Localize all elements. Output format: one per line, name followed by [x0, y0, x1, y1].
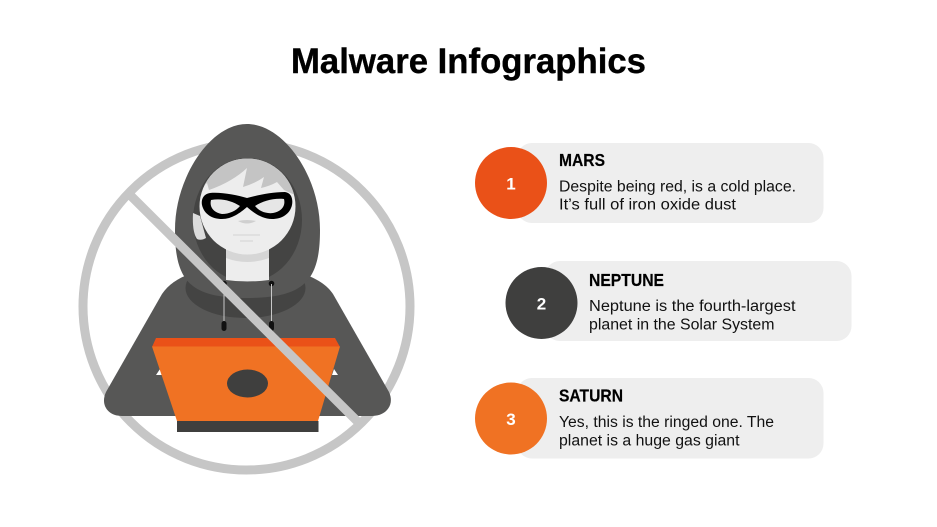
hair: [204, 158, 294, 194]
laptop base: [177, 421, 318, 432]
hood cavity: [193, 158, 302, 282]
heading: NEPTUNE: [589, 270, 664, 290]
prohibition ring: [83, 143, 410, 470]
left hoodie string: [221, 281, 227, 331]
mask lenses: [211, 199, 284, 214]
ear: [193, 213, 206, 240]
white highlights: [156, 369, 338, 375]
card: [517, 143, 824, 223]
neck shadow: [226, 250, 269, 262]
laptop body: [152, 346, 340, 421]
body: planet in the Solar System: [589, 316, 774, 334]
right hoodie string: [269, 281, 274, 331]
prohibition slash: [128, 193, 358, 422]
card: [517, 378, 824, 458]
neck: [226, 240, 269, 282]
hood: [175, 124, 320, 298]
body: Yes, this is the ringed one. The: [559, 414, 774, 431]
item 1: Mars: [475, 143, 824, 223]
laptop logo: [227, 370, 268, 398]
number: 1: [506, 174, 516, 194]
item 2: Neptune: [506, 261, 852, 341]
item 3: Saturn: [475, 378, 824, 458]
hacker body: [104, 274, 391, 416]
illustration: hacker with prohibition sign: [83, 124, 410, 470]
heading: SATURN: [559, 386, 623, 406]
hood shadow: [186, 258, 306, 318]
mask: [202, 192, 292, 219]
number circle: [475, 382, 547, 454]
number circle: [475, 147, 547, 219]
card: [545, 261, 852, 341]
mouth: [233, 235, 260, 241]
body: Despite being red, is a cold place.: [559, 178, 796, 196]
number: 3: [506, 410, 516, 429]
laptop lid edge: [152, 338, 340, 347]
nose: [238, 220, 256, 224]
body: It’s full of iron oxide dust: [559, 196, 737, 214]
face: [200, 158, 296, 254]
number: 2: [537, 294, 546, 314]
heading: MARS: [559, 150, 605, 170]
body: planet is a huge gas giant: [559, 432, 740, 450]
number circle: [506, 267, 578, 339]
title: Malware Infographics: [291, 41, 646, 81]
body: Neptune is the fourth-largest: [589, 298, 796, 315]
